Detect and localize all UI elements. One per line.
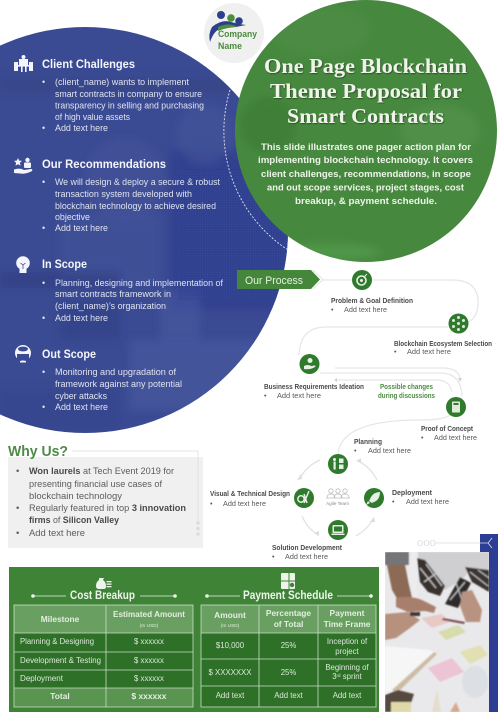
process step: planning: Planning [354, 437, 382, 446]
process step: business requirements ideation [264, 354, 364, 400]
icon: agile team [326, 489, 350, 506]
text block: • [42, 367, 45, 377]
text block: cyber attacks [55, 391, 107, 401]
dashed arc around green circle [224, 90, 288, 250]
text block: blockchain technology [29, 491, 122, 502]
text block: firms of Silicon Valley [29, 515, 120, 526]
text block: Monitoring and upgradation of [55, 367, 176, 377]
text block: Add text here [55, 123, 108, 133]
table: cost: $ xxxxxx [134, 656, 164, 665]
table: payment: Add text [274, 691, 304, 700]
text block: framework against any potential [55, 379, 182, 389]
process step: problem and goal definition: Add text here [344, 305, 387, 314]
text block: Won laurels at Tech Event 2019 for [29, 466, 175, 477]
text: slide description: implementing blockchain technology. It covers [258, 155, 473, 166]
table: payment: Percentage [266, 608, 311, 618]
text block: transaction system developed with [55, 189, 192, 199]
text block: • [16, 466, 19, 477]
heading: Payment Schedule [243, 590, 333, 602]
process step: business requirements ideation: Add text here [277, 391, 321, 400]
process step: deployment: • [392, 497, 395, 506]
text block [42, 367, 182, 412]
table: payment: 25% [281, 668, 296, 677]
table: cost: Development & Testing [20, 656, 101, 665]
heading: Why Us? [8, 443, 68, 460]
text: slide description: This slide illustrates one pager action plan for [261, 142, 471, 153]
panel: cost breakup [14, 578, 193, 707]
photo: hands over sticky notes [385, 552, 489, 712]
process step: planning: Add text here [368, 446, 411, 455]
text block: (client_name) wants to implement [55, 77, 189, 87]
text block [16, 466, 186, 539]
text block: of high value assets [55, 112, 130, 122]
process step: deployment: Add text here [406, 497, 449, 506]
table: cost: $ xxxxxx [134, 637, 164, 646]
table: cost: $ xxxxxx [134, 674, 164, 683]
icon: agile team: Agile Team [326, 501, 349, 506]
text block: transparency in selling and purchasing [55, 100, 204, 110]
section: out scope [15, 345, 182, 412]
process step: visual and technical design [210, 488, 314, 508]
logo: company name badge [204, 3, 264, 63]
text block: • [42, 278, 45, 288]
process step: visual and technical design: • [210, 499, 213, 508]
process step: proof of concept: • [421, 433, 424, 442]
table: payment: Add text [216, 691, 245, 700]
decorative connector with blue corner block: 000 [417, 539, 437, 548]
table: payment [201, 605, 376, 707]
section: in scope [16, 256, 223, 323]
arrow: our process label [237, 270, 323, 289]
title: Smart Contracts [287, 104, 444, 128]
heading: Client Challenges [42, 57, 135, 71]
title [264, 54, 467, 128]
text block [42, 177, 220, 233]
table: cost: (In USD) [140, 623, 159, 629]
table: payment: Payment [330, 608, 365, 618]
process connector lines [299, 280, 478, 455]
heading: In Scope [42, 257, 87, 271]
process step: deployment: Deployment [392, 488, 433, 497]
section: our recommendations [14, 157, 220, 233]
process step: problem and goal definition: Problem & Goal Definition [331, 296, 413, 305]
heading: Out Scope [42, 347, 96, 361]
text block: Add text here [55, 223, 108, 233]
text: slide description: and out scope services, project stages, cost [267, 182, 465, 194]
text: slide description [258, 142, 473, 207]
heading: Cost Breakup [70, 590, 135, 602]
table: payment: Time Frame [324, 619, 371, 629]
section: client challenges [14, 55, 204, 133]
table: payment: Amount [214, 610, 246, 620]
text: slide description: client challenges, recommendations, in scope [261, 169, 471, 180]
callout: possible changes during discussions: during discussions [378, 391, 435, 400]
process step: planning [328, 437, 411, 474]
text block: • [42, 223, 45, 233]
table: cost: $ xxxxxx [132, 691, 167, 701]
table: payment: Add text [333, 691, 362, 700]
callout: possible changes during discussions: Possible changes [380, 382, 433, 391]
text block: We will design & deploy a secure & robust [55, 177, 220, 187]
process step: blockchain ecosystem selection [394, 314, 492, 356]
text block: • [42, 123, 45, 133]
process step: visual and technical design: Add text here [223, 499, 266, 508]
panel: green title circle [235, 0, 497, 262]
text block: • [42, 402, 45, 412]
table: cost: Milestone [41, 614, 80, 624]
icon: money bag [96, 578, 112, 589]
table: payment: Beginning of [325, 663, 370, 672]
text: slide description: breakup, & payment schedule. [295, 196, 437, 207]
icon: hand with star and person [14, 158, 32, 174]
process step: visual and technical design: Visual & Technical Design [210, 489, 290, 498]
process step: solution development [272, 520, 348, 561]
process step: business requirements ideation: Business Requirements Ideation [264, 382, 364, 391]
text block: blockchain technology to achieve desired [55, 201, 216, 211]
table: cost: Estimated Amount [113, 609, 185, 619]
logo: company name badge: Name [218, 41, 242, 52]
process step: solution development: Add text here [285, 552, 328, 561]
panel: green tables background [9, 567, 379, 712]
text block [42, 278, 223, 323]
process step: blockchain ecosystem selection: • [394, 347, 397, 356]
text block: Add text here [55, 313, 108, 323]
text block: objective [55, 212, 90, 222]
process step: proof of concept [421, 397, 477, 442]
text block: (client_name)’s organization [55, 301, 166, 311]
icon: payment sheet [281, 573, 295, 589]
text block: Add text here [29, 528, 85, 539]
text block [42, 77, 204, 133]
process step: proof of concept: Proof of Concept [421, 424, 474, 433]
table: payment: $ XXXXXXX [209, 668, 252, 677]
decorative connector with blue corner block [417, 534, 498, 712]
process step: business requirements ideation: • [264, 391, 267, 400]
process step: proof of concept: Add text here [434, 433, 477, 442]
table: payment: sprint [341, 672, 363, 681]
callout: possible changes during discussions [378, 382, 435, 400]
table: cost: Planning & Designing [20, 637, 94, 646]
process step: deployment [364, 488, 449, 508]
text block: presenting financial use cases of [29, 479, 162, 490]
text block: smart contracts framework in [55, 289, 171, 299]
text block: • [42, 313, 45, 323]
table: payment: $10,000 [216, 641, 245, 650]
title: One Page Blockchain [264, 54, 467, 78]
table: payment: 3 [332, 672, 337, 681]
table: payment: 25% [281, 641, 296, 650]
panel: why us [8, 443, 203, 548]
table: payment: of Total [274, 619, 303, 629]
text block: • [16, 528, 19, 539]
arrow: our process label: Our Process [245, 275, 303, 287]
process step: planning: • [354, 446, 357, 455]
text block: Planning, designing and implementation of [55, 278, 223, 288]
table: payment: Inception of [327, 637, 368, 646]
logo: company name badge: Company [218, 29, 258, 40]
table: payment: (In USD) [221, 623, 240, 629]
table: payment: rd [337, 673, 341, 678]
text block: • [42, 177, 45, 187]
process step: blockchain ecosystem selection: Add text here [407, 347, 451, 356]
process step: solution development: Solution Development [272, 543, 343, 552]
text block: • [42, 77, 45, 87]
panel: blue circle with scope sections [0, 27, 290, 433]
table: cost: Total [50, 691, 70, 701]
process step: problem and goal definition: • [331, 305, 334, 314]
title: Theme Proposal for [270, 79, 462, 103]
process step: problem and goal definition [331, 270, 413, 314]
icon: monitor with eye [15, 345, 31, 362]
icon: meeting people [14, 55, 33, 72]
process step: solution development: • [272, 552, 275, 561]
panel: payment schedule [201, 573, 376, 707]
table: cost [14, 605, 193, 707]
text block: Regularly featured in top 3 innovation [29, 503, 186, 514]
table: payment: project [335, 647, 360, 656]
agile cycle arcs [297, 458, 377, 536]
text block: • [16, 503, 19, 514]
text block: Add text here [55, 402, 108, 412]
icon: light bulb [16, 256, 30, 273]
heading: Our Recommendations [42, 157, 166, 171]
text block: smart contracts in company to ensure [55, 89, 202, 99]
table: cost: Deployment [20, 674, 64, 683]
